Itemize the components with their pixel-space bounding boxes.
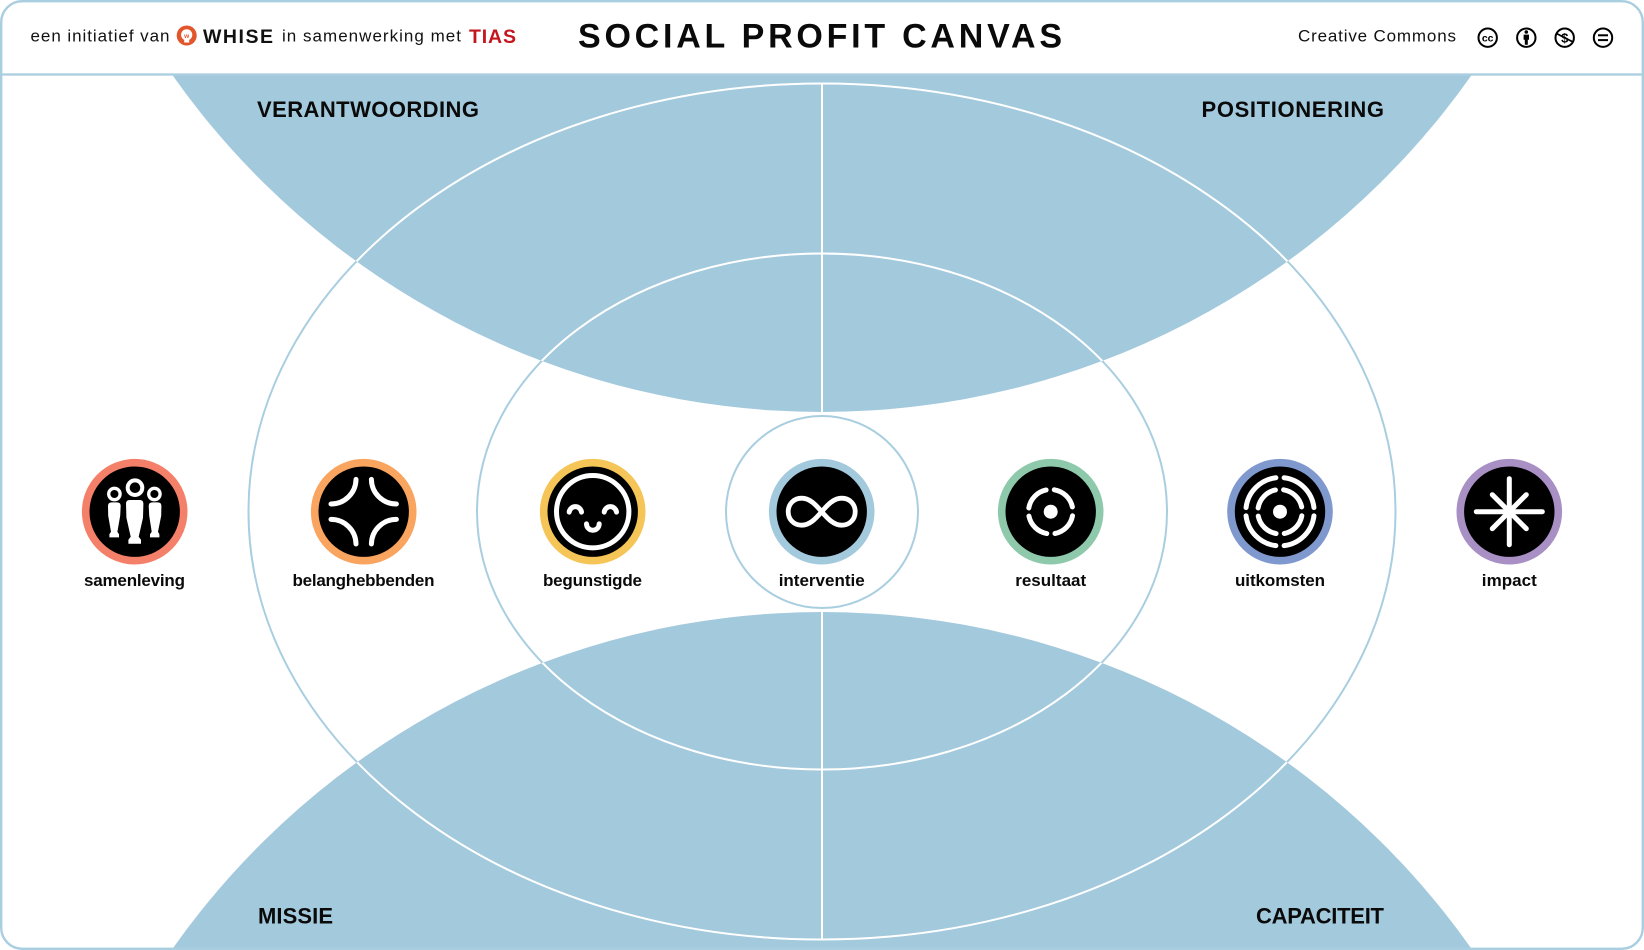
icon: eight-point star <box>1460 463 1558 561</box>
title: SOCIAL PROFIT CANVAS <box>578 18 1062 56</box>
node: samenleving <box>84 463 185 590</box>
ellipse outlines over blue lenses <box>356 82 1288 940</box>
heading: verantwoording: VERANTWOORDING <box>257 97 479 122</box>
node: impact: impact <box>1482 571 1537 590</box>
heading: positionering: POSITIONERING <box>1202 97 1384 122</box>
node: begunstigde: begunstigde <box>543 571 642 590</box>
panel: lower blue lens (missie and capaciteit) <box>172 612 1472 950</box>
center circle around interventie <box>726 416 918 608</box>
icon: cc <box>1478 28 1497 47</box>
icon: non-commercial: $ <box>1561 30 1569 45</box>
icon: no derivatives <box>1594 28 1612 47</box>
node: interventie <box>773 463 871 590</box>
node: impact <box>1460 463 1558 590</box>
heading: missie: MISSIE <box>258 904 333 928</box>
node: uitkomsten: uitkomsten <box>1235 571 1325 590</box>
header divider line <box>1 73 1643 76</box>
icon: attribution <box>1517 28 1536 47</box>
outer ellipse <box>248 84 1396 940</box>
icon: whise bulb logo <box>177 26 197 46</box>
icon: infinity <box>773 463 871 561</box>
vertical divider top <box>821 83 823 412</box>
node: belanghebbenden: belanghebbenden <box>292 571 434 590</box>
heading: capaciteit: CAPACITEIT <box>1256 904 1385 928</box>
node: resultaat <box>1002 463 1100 590</box>
icon: target with two rings <box>1231 463 1329 561</box>
header: initiative credits: in samenwerking met <box>282 27 461 46</box>
icon: cc: cc <box>1482 32 1494 44</box>
node: belanghebbenden <box>292 463 434 590</box>
icon: target with one ring <box>1002 463 1100 561</box>
icon: people <box>86 463 184 561</box>
header: initiative credits: een initiatief van <box>30 27 170 46</box>
icon: whise bulb logo: w <box>183 33 190 40</box>
vertical divider bottom <box>821 612 823 940</box>
header: creative commons label: Creative Commons <box>1298 27 1456 46</box>
header: initiative credits: TIAS <box>469 26 516 48</box>
node: resultaat: resultaat <box>1015 571 1087 590</box>
node: uitkomsten <box>1231 463 1329 590</box>
node: interventie: interventie <box>779 571 865 590</box>
inner ellipse <box>477 254 1167 770</box>
panel: upper blue lens (verantwoording and positionering) <box>172 74 1472 412</box>
icon: four arcs <box>315 463 413 561</box>
node: samenleving: samenleving <box>84 571 185 590</box>
icon: smiling face <box>544 463 642 561</box>
node: begunstigde <box>543 463 642 590</box>
header: initiative credits: WHISE <box>203 26 273 48</box>
header: initiative credits <box>30 26 516 48</box>
icon: non-commercial <box>1556 28 1574 47</box>
